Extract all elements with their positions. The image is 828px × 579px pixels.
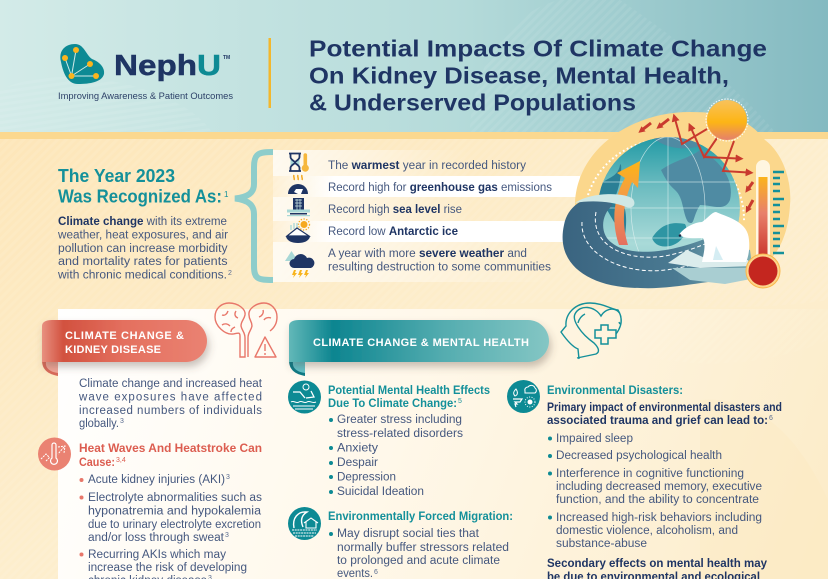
title: On Kidney Disease, Mental Health, [309,62,729,88]
icon: heat wave thermometer [38,438,71,470]
primary impact list: substance-abuse [556,538,647,550]
tagline: Improving Awareness & Patient Outcomes [58,91,234,101]
heading: potential mental health effects: Due To Climate Change: [328,396,457,410]
mental health effects list: Greater stress including [337,414,462,426]
primary impact intro: associated trauma and grief can lead to: [547,415,768,427]
intro paragraph [57,216,232,282]
intro: kidney column [78,378,263,430]
icon: building and sea level [287,198,310,216]
logo wordmark: Neph U [114,50,221,82]
primary impact intro: 6 [769,415,773,422]
kidney bullet list: and/or loss through sweat [88,532,225,544]
icon: environmental disasters [507,380,540,413]
heading: environmentally forced migration: Environmentally Forced Migration: [328,509,513,523]
heading: The Year 2023: The Year 2023 [58,166,175,186]
secondary effects text: Secondary effects on mental health may [547,558,768,570]
primary impact list: domestic violence, alcoholism, and [556,525,738,537]
content panel [58,309,828,579]
icon: antarctic ice [286,219,310,243]
primary impact list: Increased high-risk behaviors including [556,512,762,524]
heading: potential mental health effects: Potential Mental Health Effects [328,383,490,397]
primary impact intro: Primary impact of environmental disasters and [547,402,782,414]
kidney bullet list [80,474,262,579]
brace [235,152,273,280]
primary impact list: including decreased memory, executive [556,481,762,493]
primary impact intro [547,402,782,427]
trademark: TM [223,55,230,61]
logo: NephU [58,44,234,101]
heading: heat waves: Cause: [79,455,115,469]
sun [706,99,748,141]
intro: kidney column: Climate change and increased heat [79,378,263,390]
ribbon: climate change and mental health [289,320,549,376]
intro paragraph: with chronic medical conditions. [57,270,227,282]
illustration: earth, wave, polar bear, sun, thermometer [563,99,790,288]
heading: heat waves: 3,4 [116,457,126,464]
icon: head with heart and cross [561,303,621,359]
kidney bullet list: 3 [226,474,230,481]
intro: kidney column: wave exposures have affected [78,392,262,404]
wave foam [575,194,634,208]
ice floe [668,250,756,284]
polar bear [679,212,749,262]
list of 2023 records: Record high for greenhouse gas emissions [328,182,552,194]
heading: The Year 2023: 1 [224,190,229,199]
primary impact list: Decreased psychological health [556,450,722,462]
header band [0,0,828,139]
kidney bullet list: Electrolyte abnormalities such as [88,492,262,504]
kidney bullet list: 3 [225,532,229,539]
heading: The Year 2023 [58,166,229,206]
heading: potential mental health effects: 5 [458,398,462,405]
mental health effects list: Suicidal Ideation [337,486,424,498]
primary impact list [548,433,762,550]
secondary effects text [547,558,768,579]
ribbon: climate change and kidney disease [42,320,207,376]
mental health effects list: Anxiety [337,442,378,454]
title: Potential Impacts Of Climate Change [309,36,767,62]
page background [0,139,828,579]
migration list: May disrupt social ties that [337,528,480,540]
mental health effects list: Despair [337,457,378,469]
primary impact list: Interference in cognitive functioning [556,468,744,480]
kidney bullet list: hyponatremia and hypokalemia [88,506,262,518]
migration list: normally buffer stressors related [337,542,509,554]
orange rising arrow [614,161,640,245]
ribbon: climate change and kidney disease: CLIMATE CHANGE & [65,330,184,342]
icon: swimmer in flood [288,380,321,414]
kidney bullet list: increase the risk of developing [88,562,247,574]
intro: kidney column: 3 [120,418,124,425]
intro paragraph: Climate change with its extreme [58,216,227,228]
list of 2023 records: Record high sea level rise [328,204,462,216]
icon: wave over house [288,507,321,540]
list of 2023 records: resulting destruction to some communities [328,262,551,274]
kidney bullet list: Acute kidney injuries (AKI) [88,474,225,486]
primary impact list: Impaired sleep [556,433,633,445]
intro paragraph: and mortality rates for patients [58,256,228,268]
kidney bullet list: due to urinary electrolyte excretion [88,519,261,531]
intro paragraph: 2 [228,270,232,277]
icon: hourglass and thermometer [289,153,309,172]
logo kidney mark [60,44,104,84]
migration list [329,528,509,579]
list of 2023 records [328,160,552,274]
list of 2023 records: The warmest year in recorded history [328,160,526,172]
primary impact list: function, and the ability to concentrate [556,494,759,506]
migration list: to prolonged and acute climate [337,555,500,567]
list rows background [273,150,580,282]
thermometer [746,160,784,288]
ribbon: climate change and mental health: CLIMATE CHANGE & MENTAL HEALTH [313,337,529,349]
heading: The Year 2023: Was Recognized As: [58,186,222,206]
title [309,36,767,116]
heading: environmental disasters: Environmental Disasters: [547,383,683,397]
mental health effects list: Depression [337,472,396,484]
dotted atmosphere [588,140,744,222]
migration list: 6 [374,569,378,576]
ribbon: climate change and kidney disease: KIDNEY DISEASE [65,344,161,356]
ocean wave road [563,197,754,288]
intro: kidney column: globally. [79,418,119,430]
icon: greenhouse emissions globe [288,175,308,194]
intro: kidney column: increased numbers of individuals [79,405,262,417]
header divider [268,38,271,108]
intro paragraph: weather, heat exposures, and air [57,230,228,242]
list of 2023 records: A year with more severe weather and [328,248,527,260]
mental health effects list: stress-related disorders [337,428,463,440]
sun glow halo [575,112,790,275]
heading: potential mental health effects [328,383,490,410]
title: & Underserved Populations [309,90,636,116]
globe [599,137,740,252]
icon: severe weather [285,251,314,278]
intro paragraph: pollution can increase morbidity [58,243,228,255]
list of 2023 records: Record low Antarctic ice [328,226,458,238]
heading: heat waves: Heat Waves And Heatstroke Can [79,441,262,455]
icon: kidneys with warning [215,303,277,357]
kidney bullet list: Recurring AKIs which may [88,549,226,561]
mental health effects list [329,414,463,498]
red heat arrows [642,119,753,209]
heading: heat waves [79,441,262,469]
